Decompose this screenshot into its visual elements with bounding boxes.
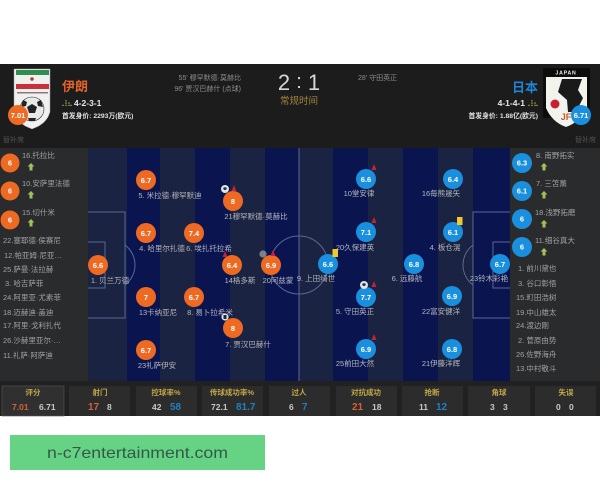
player 9 上田绮世: 9. 上田绮世 — [297, 273, 336, 283]
unused Japan substitutes list — [516, 263, 557, 373]
Iran team info — [62, 79, 133, 120]
substitute 8 南野拓实: 6.3 — [517, 158, 527, 168]
substitute 11 细谷真大: 11.细谷真大 — [535, 235, 575, 245]
player 16 毎熊晟矢: 16毎熊晟矢 — [422, 188, 461, 198]
Japan crest: JAPAN — [555, 70, 577, 76]
unused Iran substitutes list: 11.礼萨·阿萨迪 — [3, 350, 53, 360]
player 1 贝兰万德: 1. 贝兰万德 — [91, 275, 130, 285]
unused Iran substitutes list: 22.塞耶德·侯赛尼 — [3, 235, 61, 245]
player 14 格多斯: 14格多斯 — [225, 275, 256, 285]
player 4 板仓滉: 6.1 — [448, 228, 458, 237]
Japan crest — [543, 68, 590, 127]
stat: 传球成功率%: 81.7 — [236, 402, 256, 413]
player 22 富安健洋: 22富安健洋 — [422, 306, 461, 316]
Iran players — [88, 170, 294, 370]
Iran goal events — [174, 73, 241, 93]
stat: 评分: 评分 — [26, 387, 41, 397]
stat: 过人: 过人 — [292, 387, 307, 397]
stat: 控球率%: 42 — [152, 402, 162, 412]
stat: 失误 — [535, 386, 596, 416]
substitute 11 细谷真大 — [512, 235, 575, 257]
player 22 富安健洋 — [422, 286, 462, 316]
player 1 贝兰万德: 6.6 — [93, 261, 103, 270]
player 5 米拉德·穆罕默迪: 5. 米拉德·穆罕默迪 — [138, 190, 202, 200]
player 5 守田英正 — [336, 281, 376, 316]
Japan rating badge: 6.71 — [574, 111, 588, 120]
unused Iran substitutes list: 12.帕亚姆·尼亚… — [4, 250, 62, 260]
stat: 射门: 17 — [88, 402, 100, 413]
Iran rating badge — [8, 105, 28, 125]
player 8 易卜拉希米 — [184, 287, 233, 317]
stat: 过人 — [269, 386, 330, 416]
stat: 对抗成功: 21 — [352, 402, 364, 413]
player 14 格多斯 — [222, 251, 256, 285]
stat: 传球成功率%: 72.1 — [211, 402, 228, 412]
substitute 15 切什米 — [0, 207, 55, 230]
stat: 角球: 3 — [503, 402, 508, 412]
unused Japan substitutes list: 26.佐野海舟 — [516, 349, 557, 359]
player 8 易卜拉希米: 8. 易卜拉希米 — [187, 307, 233, 317]
unused Iran substitutes list: 3. 哈吉萨菲 — [5, 278, 44, 288]
stat: 过人: 7 — [302, 402, 308, 413]
player 6 远藤航 — [392, 254, 424, 283]
substitute 8 南野拓实 — [512, 150, 575, 173]
player 8 易卜拉希米: 6.7 — [189, 293, 199, 302]
header bar — [0, 64, 600, 148]
Iran rating badge: 7.01 — [11, 111, 25, 120]
stat: 角球: 角球 — [492, 387, 507, 397]
player 6 埃扎托拉希 — [184, 223, 232, 253]
player 13 卡纳亚尼: 7 — [144, 293, 148, 302]
score: 2 — [278, 70, 290, 95]
player 23 礼萨伊安: 6.7 — [141, 346, 151, 355]
unused Japan substitutes list: 2. 菅原由势 — [518, 335, 557, 345]
unused Iran substitutes list — [3, 235, 62, 360]
player 20 久保建英: 20久保建英 — [336, 242, 375, 252]
stat: 控球率%: 控球率% — [151, 387, 181, 397]
substitute 18 浅野拓磨: 6 — [520, 214, 524, 224]
stat: 评分: 7.01 — [12, 402, 29, 412]
player 23 铃木彩艳 — [470, 254, 510, 283]
player 23 礼萨伊安: 23礼萨伊安 — [138, 360, 177, 370]
player 20 阿兹蒙: 20阿兹蒙 — [263, 275, 294, 285]
player 21 穆罕默德·莫赫比 — [221, 185, 288, 221]
bench labels: 替补席 — [3, 135, 24, 144]
player 6 远藤航: 6.8 — [409, 260, 419, 269]
green website banner: n-c7entertainment.com — [47, 445, 228, 462]
bench labels: 替补席 — [575, 135, 596, 144]
player 6 远藤航: 6. 远藤航 — [392, 273, 423, 283]
stat: 失误: 0 — [569, 402, 574, 412]
main dark panel — [0, 64, 600, 416]
player 21 穆罕默德·莫赫比: 8 — [231, 197, 235, 206]
Iran goal events: 55' 穆罕默德·莫赫比 — [179, 73, 241, 82]
player 25 前田大然 — [336, 334, 376, 368]
player 21 穆罕默德·莫赫比: 21穆罕默德·莫赫比 — [224, 211, 288, 221]
substitute 15 切什米: 6 — [8, 216, 12, 224]
player 4 哈里尔扎德 — [136, 223, 185, 253]
football pitch — [88, 148, 510, 381]
player 23 礼萨伊安 — [136, 340, 177, 370]
Japan rating badge — [571, 105, 591, 125]
stats bar — [2, 386, 596, 416]
substitute 10 安萨里法德: 10.安萨里法德 — [22, 178, 70, 188]
bench labels — [3, 135, 596, 144]
score: 常规时间 — [280, 95, 318, 107]
stat: 失误: 0 — [556, 402, 561, 412]
player 6 埃扎托拉希: 7.4 — [189, 229, 200, 238]
player 7 贾汉巴赫什: 8 — [231, 324, 235, 333]
unused Iran substitutes list: 25.萨曼·法拉赫 — [3, 264, 54, 274]
Japan team info: 日本 — [512, 80, 538, 95]
stat: 对抗成功: 18 — [372, 402, 382, 412]
Iran team info: 伊朗 — [62, 79, 88, 94]
left bench panel — [0, 148, 88, 381]
stat: 控球率%: 58 — [170, 402, 182, 413]
score: : — [296, 71, 302, 93]
player 1 贝兰万德 — [88, 255, 130, 285]
substitute 15 切什米: 15.切什米 — [22, 207, 55, 217]
player 14 格多斯: 6.4 — [227, 261, 238, 270]
right bench panel — [510, 148, 600, 381]
stat: 过人: 6 — [289, 402, 294, 412]
player 9 上田绮世: 6.6 — [323, 260, 333, 269]
player 5 守田英正: 7.7 — [361, 293, 371, 302]
player 5 守田英正: 5. 守田英正 — [336, 306, 375, 316]
stat: 评分 — [2, 386, 64, 416]
Japan goal event: 28' 守田英正 — [358, 73, 397, 82]
stat: 控球率% — [136, 386, 197, 416]
player 23 铃木彩艳: 23铃木彩艳 — [470, 273, 509, 283]
stat: 抢断: 抢断 — [424, 387, 440, 397]
player 9 上田绮世 — [297, 249, 338, 283]
player 13 卡纳亚尼 — [136, 287, 177, 317]
Iran team info: 4-2-3-1 — [74, 98, 102, 108]
Japan team info: 首发身价: 1.88亿(欧元) — [468, 111, 538, 120]
player 16 毎熊晟矢: 6.4 — [448, 175, 459, 184]
player 25 前田大然: 6.9 — [361, 345, 371, 354]
unused Iran substitutes list: 26.沙赫里亚尔·… — [3, 335, 61, 345]
stat: 传球成功率%: 传球成功率% — [210, 387, 254, 397]
unused Iran substitutes list: 24.阿里亚·尤素菲 — [3, 292, 61, 302]
player 23 铃木彩艳: 6.7 — [495, 260, 505, 269]
unused Iran substitutes list: 17.阿里·戈利扎代 — [3, 320, 61, 330]
player 4 哈里尔扎德: 4. 哈里尔扎德 — [139, 243, 185, 253]
stat: 射门 — [69, 386, 130, 416]
unused Japan substitutes list: 24.渡边刚 — [516, 320, 549, 330]
player 20 久保建英: 7.1 — [361, 228, 371, 237]
unused Japan substitutes list: 19.中山雄太 — [516, 307, 557, 317]
green website banner — [10, 435, 265, 470]
stat: 角球: 3 — [490, 402, 495, 412]
player 10 堂安律: 10堂安律 — [344, 188, 375, 198]
substitute 11 细谷真大: 6 — [520, 242, 524, 252]
substitute 18 浅野拓磨 — [512, 207, 576, 229]
player 10 堂安律 — [344, 164, 376, 198]
Japan players — [297, 164, 510, 368]
player 16 毎熊晟矢 — [422, 169, 463, 198]
stat: 抢断: 11 — [419, 402, 428, 412]
Japan team info — [468, 80, 538, 120]
player 7 贾汉巴赫什 — [221, 313, 271, 349]
unused Japan substitutes list: 15.町田浩树 — [516, 292, 557, 302]
unused Iran substitutes list: 18.迈赫迪·盖迪 — [3, 307, 54, 317]
substitute 7 三笘薰: 6.1 — [517, 186, 527, 196]
stat: 射门: 射门 — [92, 387, 108, 397]
player 20 久保建英 — [336, 217, 376, 252]
Iran goal events: 96' 贾汉巴赫什 (点球) — [174, 84, 241, 93]
player 10 堂安律: 6.6 — [361, 175, 371, 184]
substitute 16 托拉比: 16.托拉比 — [22, 150, 55, 160]
Iran team info: 首发身价: 2293万(欧元) — [62, 111, 133, 120]
player 5 米拉德·穆罕默迪: 6.7 — [141, 176, 151, 185]
Japan team info: 4-1-4-1 — [498, 98, 525, 108]
Iran crest — [14, 69, 50, 129]
player 20 阿兹蒙: 6.9 — [266, 261, 276, 270]
unused Japan substitutes list: 13.中村敬斗 — [516, 363, 557, 373]
player 21 伊藤洋辉: 6.8 — [447, 345, 457, 354]
substitute 18 浅野拓磨: 18.浅野拓磨 — [535, 207, 576, 217]
stat: 对抗成功 — [336, 386, 397, 416]
stat: 射门: 8 — [107, 402, 112, 412]
substitute 7 三笘薰: 7. 三笘薰 — [536, 178, 567, 188]
player 5 米拉德·穆罕默迪 — [136, 170, 202, 200]
stat: 评分: 6.71 — [39, 402, 56, 412]
substitute 7 三笘薰 — [512, 178, 567, 201]
player 7 贾汉巴赫什: 7. 贾汉巴赫什 — [225, 339, 271, 349]
unused Japan substitutes list: 3. 谷口彰悟 — [518, 278, 557, 288]
player 20 阿兹蒙 — [259, 250, 294, 285]
player 4 哈里尔扎德: 6.7 — [141, 229, 151, 238]
stat: 传球成功率% — [202, 386, 263, 416]
stat: 对抗成功: 对抗成功 — [351, 387, 381, 397]
stat: 角球 — [468, 386, 530, 416]
stat: 抢断: 12 — [436, 402, 448, 413]
player 22 富安健洋: 6.9 — [447, 292, 457, 301]
player 25 前田大然: 25前田大然 — [336, 358, 375, 368]
substitute 10 安萨里法德 — [0, 178, 70, 200]
score: 1 — [308, 70, 320, 95]
substitute 10 安萨里法德: 6 — [8, 186, 12, 196]
player 21 伊藤洋辉: 21伊藤洋辉 — [422, 358, 461, 368]
unused Japan substitutes list: 1. 前川黛也 — [518, 263, 557, 273]
substitute 16 托拉比 — [0, 150, 55, 172]
Japan crest: JF — [561, 112, 572, 122]
substitute 8 南野拓实: 8. 南野拓实 — [536, 150, 575, 160]
player 13 卡纳亚尼: 13卡纳亚尼 — [139, 307, 177, 317]
substitute 16 托拉比: 6 — [8, 158, 12, 168]
stat: 失误: 失误 — [558, 387, 574, 397]
stat: 抢断 — [402, 386, 463, 416]
player 6 埃扎托拉希: 6. 埃扎托拉希 — [186, 243, 232, 253]
score — [278, 70, 320, 107]
player 4 板仓滉: 4. 板仓滉 — [430, 242, 461, 252]
player 21 伊藤洋辉 — [422, 339, 462, 368]
player 4 板仓滉 — [430, 217, 463, 252]
